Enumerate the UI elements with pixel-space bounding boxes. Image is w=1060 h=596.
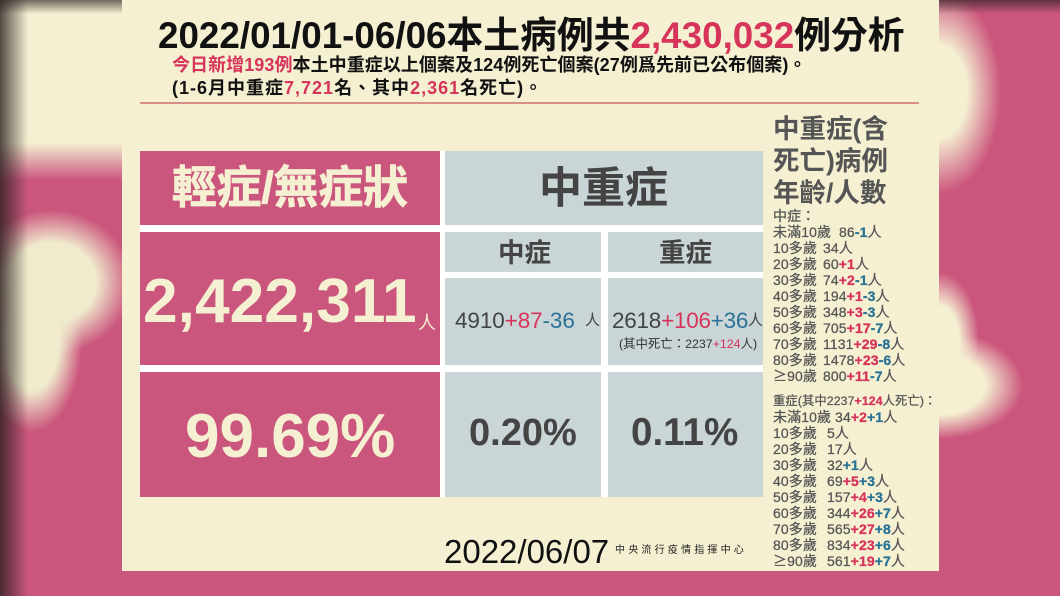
- list: moderate cases by age: 40多歲: [773, 288, 817, 304]
- list: severe cases by age: 70多歲: [773, 521, 817, 537]
- list: moderate cases by age: [773, 208, 905, 386]
- list: severe cases by age: [773, 394, 936, 571]
- date: 2022/06/07: [444, 533, 609, 570]
- list: moderate cases by age: 34人: [823, 240, 853, 256]
- panel: mild count: [140, 232, 440, 365]
- list: severe cases by age: ≥90歲: [773, 551, 817, 571]
- list: moderate cases by age: 1131+29-8人: [823, 336, 904, 352]
- mild count number: 2,422,311: [143, 267, 417, 336]
- list: severe cases by age: 17人: [827, 441, 857, 457]
- moderate count figures: 人: [585, 312, 600, 329]
- list: severe cases by age: 5人: [827, 425, 849, 441]
- panel: severe sub header: [608, 232, 763, 272]
- list: moderate cases by age: 74+2-1人: [823, 272, 882, 288]
- title: 2022/01/01-06/06本土病例共2,430,032例分析: [158, 15, 905, 56]
- list: severe cases by age: 20多歲: [773, 441, 817, 457]
- list: severe cases by age: 60多歲: [773, 505, 817, 521]
- list: severe cases by age: 30多歲: [773, 457, 817, 473]
- panel: moderate count: [445, 278, 601, 365]
- list: severe cases by age: 重症(其中2237+124人死亡)：: [773, 394, 936, 408]
- list: moderate cases by age: 800+11-7人: [823, 368, 897, 384]
- list: severe cases by age: 10多歲: [773, 425, 817, 441]
- list: moderate cases by age: 30多歲: [773, 272, 817, 288]
- list: moderate cases by age: 70多歲: [773, 336, 817, 352]
- header divider: [140, 102, 919, 104]
- heading: age breakdown: [773, 114, 888, 208]
- list: severe cases by age: 344+26+7人: [827, 505, 905, 521]
- list: moderate cases by age: 80多歲: [773, 352, 817, 368]
- list: moderate cases by age: 10多歲: [773, 240, 817, 256]
- moderate count figures: 4910+87-36: [455, 308, 575, 333]
- list: severe cases by age: 未滿10歲 34+2+1人: [773, 409, 897, 425]
- panel: severe percent: [608, 372, 763, 497]
- source: central epidemic command center: 中央流行疫情指揮中心: [615, 545, 747, 556]
- subtitle line 1: 今日新增193例本土中重症以上個案及124例死亡個案(27例爲先前已公布個案)。: [172, 55, 806, 75]
- subtitle text block: [172, 55, 806, 98]
- heading: moderate: 中症: [498, 238, 551, 268]
- list: moderate cases by age: 194+1-3人: [823, 288, 890, 304]
- list: moderate cases by age: 348+3-3人: [823, 304, 890, 320]
- list: severe cases by age: 32+1人: [827, 457, 873, 473]
- heading: age breakdown: 年齡/人數: [773, 178, 886, 208]
- heading: age breakdown: 死亡)病例: [773, 146, 888, 176]
- severe count figures: 人: [748, 312, 763, 329]
- severe percentage: 0.11%: [631, 411, 738, 454]
- mild percentage: 99.69%: [185, 402, 395, 471]
- panel: moderate percent: [445, 372, 601, 497]
- list: severe cases by age: 50多歲: [773, 489, 817, 505]
- list: moderate cases by age: 705+17-7人: [823, 320, 898, 336]
- list: severe cases by age: 561+19+7人: [827, 553, 905, 569]
- list: severe cases by age: 40多歲: [773, 473, 817, 489]
- list: severe cases by age: 565+27+8人: [827, 521, 905, 537]
- list: moderate cases by age: 50多歲: [773, 304, 817, 320]
- heading: moderate and severe: 中重症: [539, 165, 668, 213]
- heading: age breakdown: 中重症(含: [773, 114, 888, 144]
- list: moderate cases by age: 中症：: [773, 208, 815, 224]
- panel: moderate and severe header: [445, 151, 763, 225]
- panel: mild header: [140, 151, 440, 225]
- subtitle line 2: (1-6月中重症7,721名、其中2,361名死亡)。: [172, 78, 543, 98]
- list: moderate cases by age: 1478+23-6人: [823, 352, 905, 368]
- heading: severe: 重症: [659, 238, 712, 268]
- list: moderate cases by age: 未滿10歲 86-1人: [773, 224, 882, 240]
- list: severe cases by age: 69+5+3人: [827, 473, 889, 489]
- panel: moderate sub header: [445, 232, 601, 272]
- severe deaths note: (其中死亡：2237+124人): [619, 337, 757, 351]
- main cream panel: [122, 0, 939, 571]
- list: severe cases by age: 157+4+3人: [827, 489, 897, 505]
- list: moderate cases by age: 60多歲: [773, 320, 817, 336]
- list: moderate cases by age: 60+1人: [823, 256, 869, 272]
- list: moderate cases by age: ≥90歲: [773, 366, 817, 386]
- mild count unit: 人: [418, 313, 436, 333]
- list: severe cases by age: 80多歲: [773, 537, 817, 553]
- list: moderate cases by age: 20多歲: [773, 256, 817, 272]
- panel: mild percent: [140, 372, 440, 497]
- panel: severe count: [608, 278, 763, 365]
- severe count figures: 2618+106+36: [612, 308, 748, 333]
- heading: mild or asymptomatic: 輕症/無症狀: [172, 164, 408, 213]
- table background: [140, 151, 763, 497]
- list: severe cases by age: 834+23+6人: [827, 537, 905, 553]
- moderate percentage: 0.20%: [469, 412, 577, 454]
